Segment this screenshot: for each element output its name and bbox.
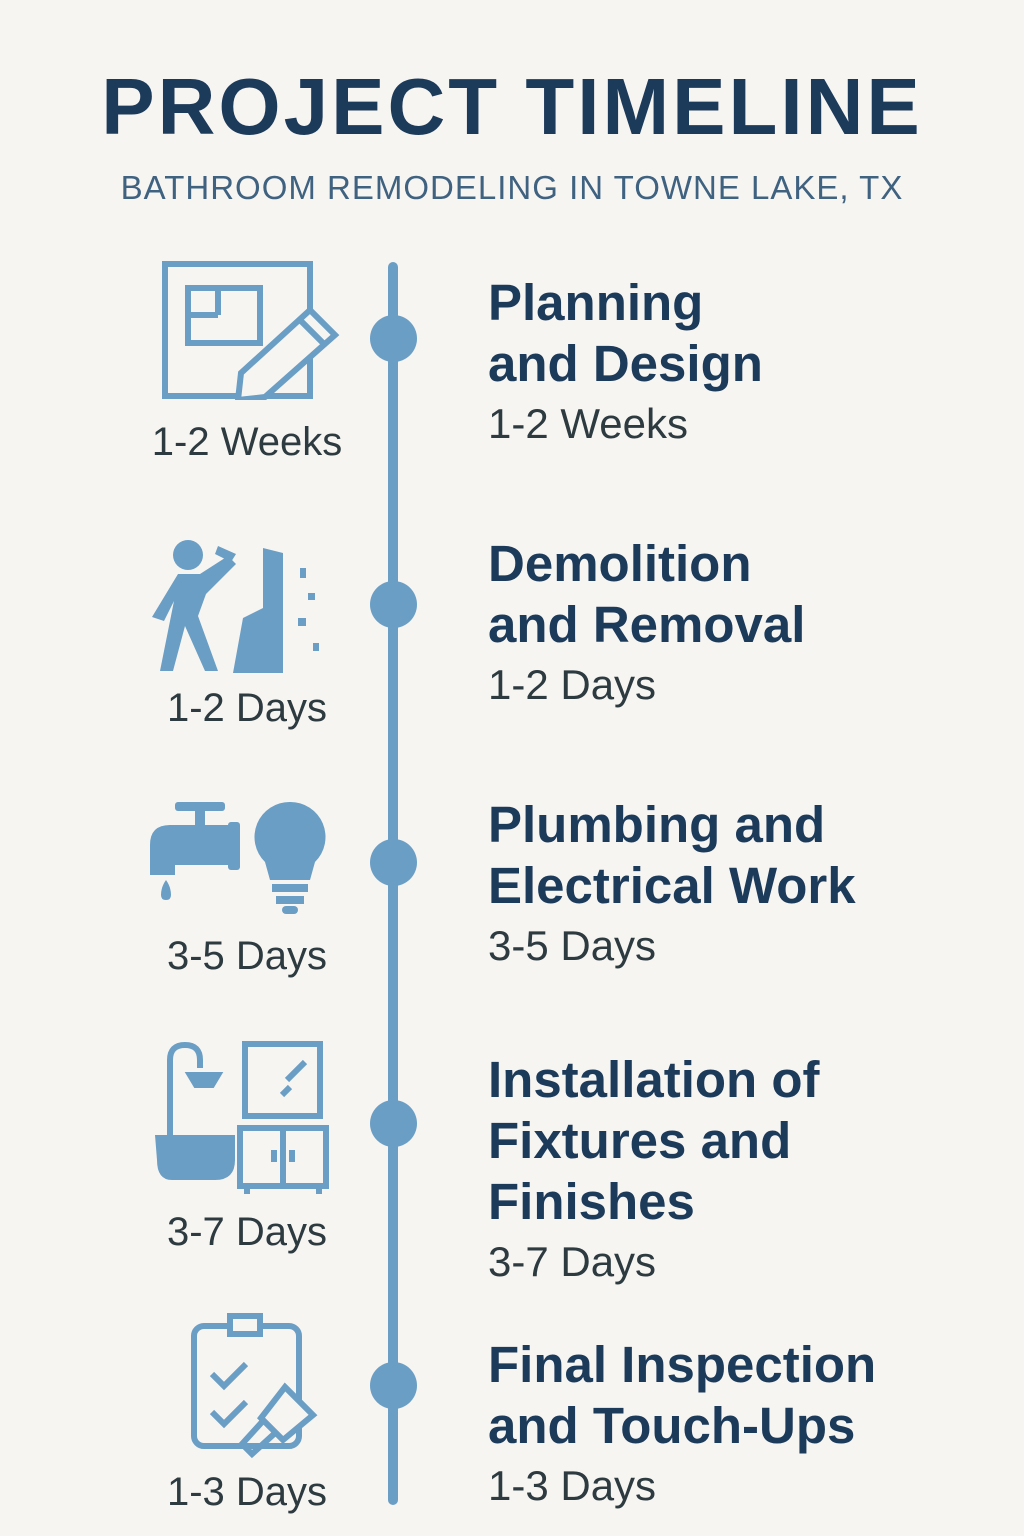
heading 4: 3-7 Days [488, 1238, 656, 1285]
heading 3 [488, 796, 856, 969]
heading 4: Installation of [488, 1051, 820, 1108]
heading 1: Planning [488, 274, 703, 331]
heading 2: Demolition [488, 535, 752, 592]
dot 1 [370, 315, 417, 362]
heading 1: 1-2 Weeks [488, 400, 688, 447]
label 5: 1-3 Days [167, 1470, 327, 1514]
heading 4 [488, 1051, 820, 1285]
timeline line [388, 262, 398, 1505]
title: PROJECT TIMELINE [101, 62, 923, 151]
label 4: 3-7 Days [167, 1210, 327, 1254]
heading 2 [488, 535, 805, 708]
heading 3: 3-5 Days [488, 922, 656, 969]
heading 3: Plumbing and [488, 796, 825, 853]
heading 4: Fixtures and [488, 1112, 791, 1169]
heading 5: and Touch-Ups [488, 1397, 855, 1454]
heading 5: 1-3 Days [488, 1462, 656, 1509]
heading 5: Final Inspection [488, 1336, 876, 1393]
subtitle: BATHROOM REMODELING IN TOWNE LAKE, TX [121, 169, 903, 206]
heading 1: and Design [488, 335, 763, 392]
label 1: 1-2 Weeks [152, 420, 342, 464]
icon: clipboard check brush [191, 1313, 318, 1458]
dot 4 [370, 1100, 417, 1147]
dot 2 [370, 581, 417, 628]
label 3: 3-5 Days [167, 934, 327, 978]
heading 4: Finishes [488, 1173, 695, 1230]
heading 3: Electrical Work [488, 857, 856, 914]
heading 5 [488, 1336, 876, 1509]
icon: demolition worker [152, 540, 319, 673]
label 2: 1-2 Days [167, 686, 327, 730]
heading 1 [488, 274, 763, 447]
heading 2: 1-2 Days [488, 661, 656, 708]
icon: bathtub shower vanity [155, 1041, 329, 1194]
dot 5 [370, 1362, 417, 1409]
heading 2: and Removal [488, 596, 805, 653]
icon: blueprint and pencil [162, 261, 340, 400]
dot 3 [370, 839, 417, 886]
icon: faucet and bulb [150, 802, 326, 914]
